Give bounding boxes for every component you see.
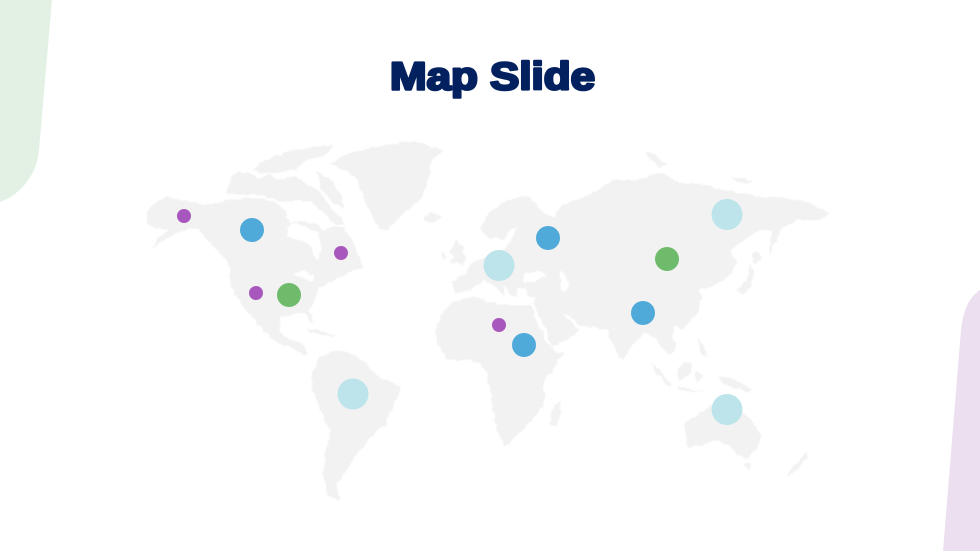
marker: Western US [249, 286, 263, 300]
landmass: South America [312, 350, 401, 500]
decorative corner shape: green [0, 0, 52, 202]
landmass: Madagascar [550, 400, 561, 427]
marker: Quebec [334, 246, 348, 260]
marker: Brazil [338, 378, 368, 410]
markers: purple small [177, 209, 506, 332]
inland waters [287, 223, 569, 293]
marker: North Africa [492, 318, 506, 332]
title: Map Slide [390, 56, 595, 98]
water: Great Lakes [294, 270, 316, 281]
landmass: Sumatra, Java, Borneo [650, 362, 706, 392]
water: Caspian Sea [560, 272, 569, 293]
marker: Siberia [712, 199, 742, 230]
marker: Sudan [512, 333, 536, 357]
marker: Australia [712, 394, 742, 425]
water: Hudson Bay [287, 223, 322, 260]
markers: blue medium [240, 218, 655, 357]
marker: Canada [240, 218, 264, 242]
landmass: Japan and Sakhalin [738, 250, 762, 296]
landmass: Tasmania [745, 463, 751, 470]
landmass: Iceland [423, 213, 442, 222]
landmass: Great Britain and Ireland [441, 240, 466, 264]
world map [146, 141, 830, 500]
landmass: Eurasia [451, 173, 830, 361]
landmass: New Zealand [786, 452, 808, 478]
marker: China south [631, 301, 655, 325]
decorative corner shape: purple [943, 290, 980, 551]
marker: Europe [484, 250, 514, 281]
landmass: North America [146, 197, 364, 355]
marker: Russia west [536, 226, 560, 250]
landmass: Australia [684, 398, 761, 458]
marker: Alaska [177, 209, 191, 223]
markers: green medium [277, 247, 679, 307]
marker: Central US [277, 283, 301, 307]
markers: light teal large [338, 199, 742, 425]
landmass: Philippines and New Guinea [696, 338, 752, 392]
landmass: Cuba and Caribbean [307, 328, 337, 336]
landmass: Greenland [330, 141, 443, 232]
landmass: Arctic islands [226, 146, 345, 224]
landmass: Arctic Russia [645, 152, 755, 183]
marker: Mongolia [655, 247, 679, 271]
landmass: Africa [435, 296, 564, 447]
water: Black Sea [523, 271, 547, 282]
